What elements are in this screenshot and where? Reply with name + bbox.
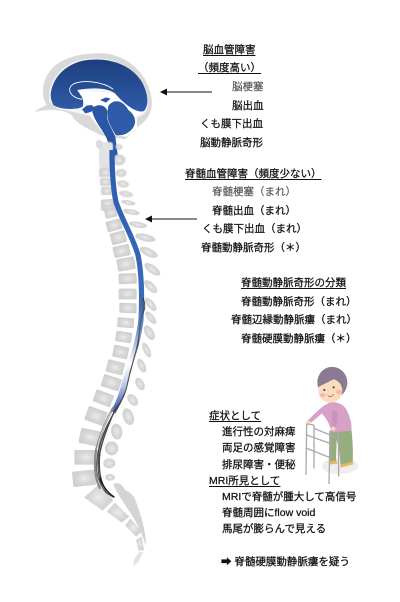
symptom: urination and constipation: 排尿障害・便秘	[222, 459, 296, 471]
finding: cord swelling: MRIで脊髄が腫大して高信号	[222, 491, 356, 503]
item: cerebral hemorrhage: 脳出血	[232, 100, 264, 112]
finding: cauda equina: 馬尾が膨らんで見える	[222, 523, 326, 535]
thoracic vertebrae	[100, 199, 162, 392]
item: spinal hemorrhage: 脊髄出血（まれ）	[212, 205, 296, 217]
dilated draining veins	[95, 298, 145, 497]
arrow: to spinal cord	[145, 216, 197, 222]
heading: high frequency: （頻度高い）	[198, 62, 261, 74]
heading: spinal vascular disorders: 脊髄血管障害（頻度少ない）	[185, 168, 322, 180]
torso and arm	[307, 402, 351, 433]
spinal cord	[112, 150, 142, 412]
item: spinal AVM rare: 脊髄動静脈奇形（まれ）	[241, 296, 356, 308]
item: dural AVF: 脊髄硬膜動静脈瘻（＊）	[241, 333, 356, 345]
lumbar vertebrae and sacrum	[72, 389, 146, 567]
symptom: paraplegia: 進行性の対麻痺	[222, 426, 296, 438]
heading: MRI findings: MRI所見として	[209, 475, 280, 487]
illustration: elderly woman with walker	[306, 367, 358, 484]
cervical to thoracic vertebrae	[96, 140, 133, 211]
item: spinal infarction: 脊髄梗塞（まれ）	[212, 186, 296, 198]
corpus callosum arc	[70, 82, 113, 99]
walker	[306, 423, 339, 484]
cerebellum	[107, 101, 135, 135]
heading: classification: 脊髄動静脈奇形の分類	[241, 277, 346, 289]
skull	[34, 53, 152, 139]
head	[318, 367, 347, 398]
heading: brain vascular disorders: 脳血管障害	[203, 44, 256, 56]
item: spinal AVM: 脊髄動静脈奇形（＊）	[201, 242, 306, 254]
conclusion: suspect dural AVF: ➡ 脊髄硬膜動静脈瘻を疑う	[221, 556, 350, 568]
item: subarachnoid hemorrhage: くも膜下出血	[200, 118, 263, 130]
item: cerebral AVM: 脳動静脈奇形	[200, 137, 263, 149]
brainstem	[92, 105, 118, 157]
legs	[329, 428, 353, 465]
cerebrum	[51, 60, 147, 112]
item: cerebral infarction: 脳梗塞	[232, 81, 264, 93]
item: perimedullary AVF: 脊髄辺縁動静脈瘻（まれ）	[231, 314, 357, 326]
arrow: to brain	[160, 88, 212, 96]
item: subarachnoid hemorrhage rare: くも膜下出血（まれ）	[202, 223, 307, 235]
symptom: sensory disorder: 両足の感覚障害	[222, 442, 296, 454]
skull and brain	[34, 53, 152, 157]
finding: flow void: 脊髄周囲にflow void	[222, 507, 315, 519]
heading: symptoms: 症状として	[209, 410, 261, 422]
